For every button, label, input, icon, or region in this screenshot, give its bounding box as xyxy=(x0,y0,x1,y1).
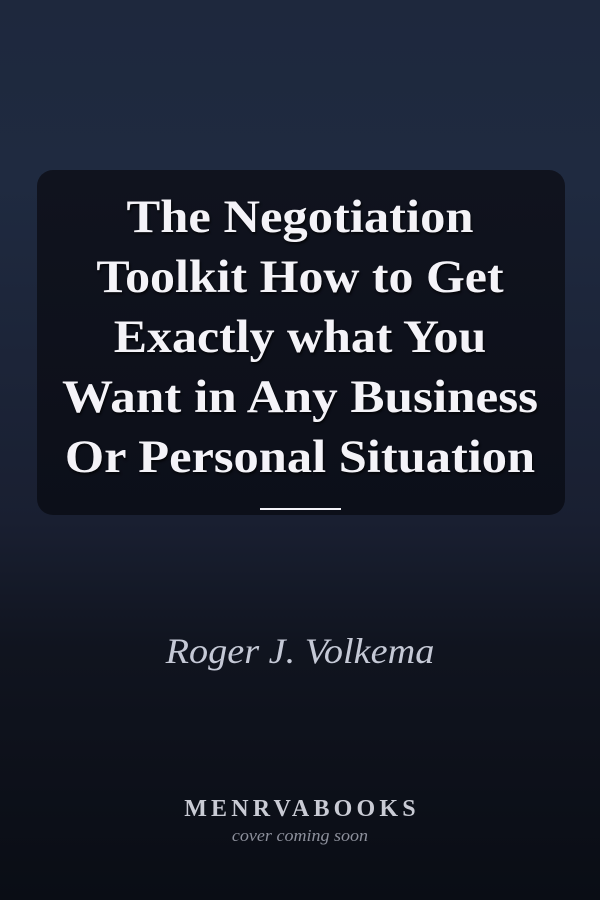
title: Exactly what You xyxy=(114,311,486,363)
panel: title backdrop xyxy=(37,170,565,515)
title: Or Personal Situation xyxy=(65,431,535,483)
title: Toolkit How to Get xyxy=(96,251,504,303)
title xyxy=(62,191,538,483)
divider rule xyxy=(260,508,341,510)
author: Roger J. Volkema xyxy=(166,631,434,671)
tagline: cover coming soon xyxy=(232,826,368,845)
title: Want in Any Business xyxy=(62,371,538,423)
title: The Negotiation xyxy=(127,191,473,243)
publisher: MENRVABOOKS xyxy=(184,796,420,822)
